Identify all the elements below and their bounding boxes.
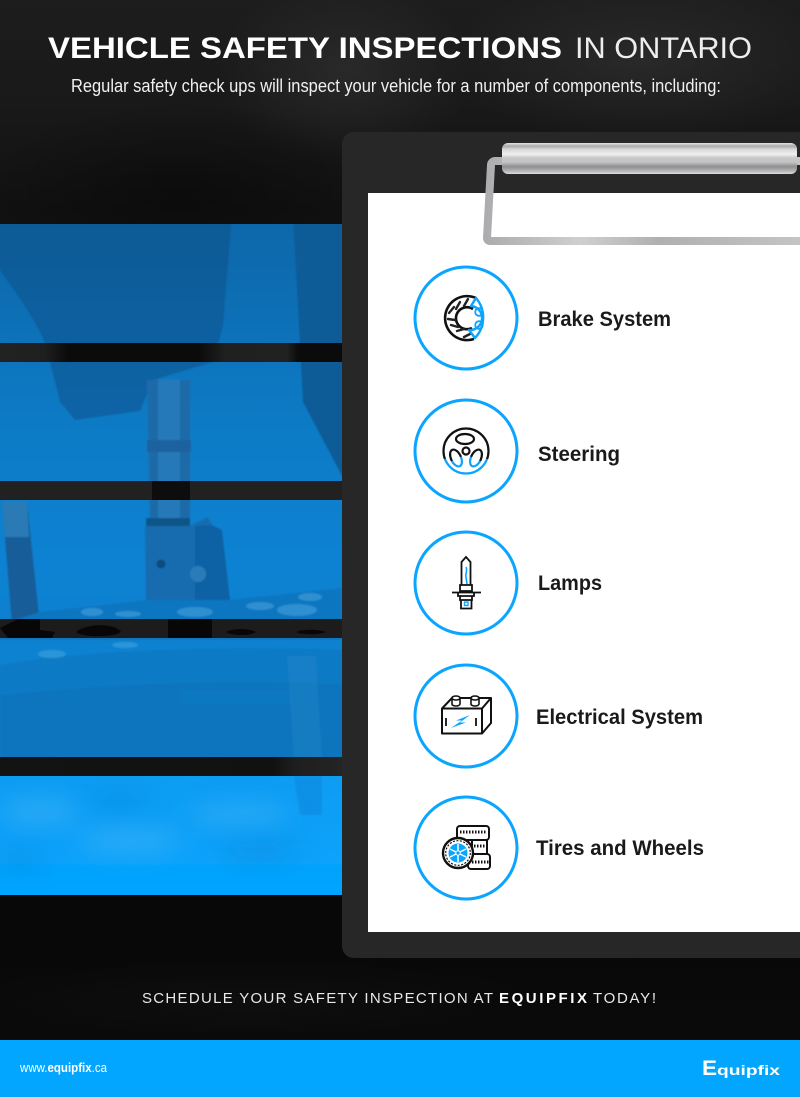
label: tires and wheels: Tires and Wheels: [536, 837, 704, 860]
call to action: [142, 990, 656, 1007]
icon: brake disc: [415, 267, 517, 369]
call to action: SCHEDULE YOUR SAFETY INSPECTION AT: [142, 990, 493, 1007]
photo: blurred foreground: [0, 798, 290, 854]
item: tires and wheels: [415, 797, 704, 899]
logo: quipfix: [717, 1063, 781, 1078]
item: lamps: [415, 532, 602, 634]
label: steering: Steering: [538, 443, 620, 466]
title: IN ONTARIO: [575, 32, 752, 65]
item: steering: [415, 400, 620, 502]
logo: [702, 1057, 781, 1080]
clipboard board: [342, 132, 800, 958]
photo: plate: [0, 588, 342, 640]
footer bar: [0, 1040, 800, 1097]
photo: hand: [0, 214, 232, 420]
subtitle: Regular safety check ups will inspect your vehicle for a number of components, including:: [71, 76, 721, 96]
call to action: TODAY!: [593, 990, 656, 1007]
call to action: EQUIPFIX: [499, 990, 587, 1007]
label: electrical system: Electrical System: [536, 706, 703, 729]
clipboard: [342, 132, 800, 958]
item: brake system: [415, 267, 671, 369]
photo: left peg: [2, 502, 40, 625]
clip bar: [502, 143, 797, 174]
photo: tool shaft: [146, 379, 180, 519]
blue tinted photo bands: [0, 214, 352, 905]
icon: steering wheel: [415, 400, 517, 502]
label: lamps: Lamps: [538, 572, 602, 595]
title: VEHICLE SAFETY INSPECTIONS: [48, 32, 562, 65]
clip ring: [487, 161, 800, 241]
website url: www.equipfix.ca: [19, 1060, 108, 1075]
logo: E: [702, 1057, 717, 1080]
icon: tires: [415, 797, 517, 899]
item: electrical system: [415, 665, 703, 767]
icon: headlight bulb: [415, 532, 517, 634]
title: [48, 32, 752, 65]
clipboard paper: [368, 193, 800, 932]
icon: battery: [415, 665, 517, 767]
label: brake system: Brake System: [538, 308, 671, 331]
photo: right peg: [287, 656, 322, 760]
